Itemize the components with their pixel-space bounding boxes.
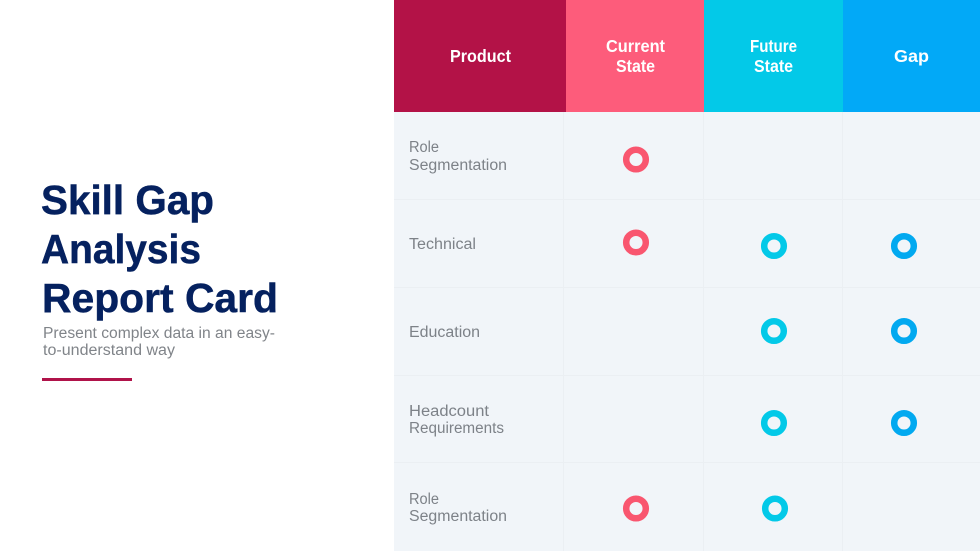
- header: Future State: Future: [750, 36, 797, 56]
- header: Future State: State: [754, 56, 793, 76]
- row label: Education: Education: [409, 324, 480, 341]
- marker: row 3 future: [764, 321, 784, 341]
- header: Current State: State: [616, 56, 655, 76]
- marker: row 5 current: [626, 499, 646, 518]
- header: Future State: [704, 0, 843, 112]
- row label: Technical: Technical: [409, 236, 476, 253]
- marker: row 2 future: [764, 236, 784, 256]
- marker: row 2 current: [626, 233, 646, 252]
- header: Current State: [566, 0, 704, 112]
- header: Product: [394, 0, 566, 112]
- header: Gap: Gap: [894, 46, 929, 66]
- row label: Role Segmentation: Segmentation: [409, 508, 507, 525]
- row label: Role Segmentation: Role: [409, 491, 439, 508]
- subtitle: to-understand way: [43, 342, 175, 359]
- row label: Headcount Requirements: Headcount: [409, 403, 490, 420]
- title: Skill Gap: [41, 177, 214, 223]
- subtitle: [43, 325, 275, 359]
- row label: Role Segmentation: [409, 491, 507, 525]
- marker: row 5 future: [765, 499, 785, 518]
- marker: row 4 future: [764, 413, 784, 433]
- title: Report Card: [42, 275, 278, 321]
- title: Analysis: [41, 226, 201, 272]
- subtitle: Present complex data in an easy-: [43, 325, 275, 342]
- row label: Role Segmentation: [409, 139, 507, 174]
- marker: row 2 gap: [894, 236, 914, 256]
- row label: Headcount Requirements: [409, 403, 504, 437]
- accent bar: [42, 378, 132, 381]
- marker: row 4 gap: [894, 413, 914, 433]
- marker: row 3 gap: [894, 321, 914, 341]
- header: Product: Product: [450, 46, 511, 66]
- row label: Role Segmentation: Segmentation: [409, 157, 507, 174]
- header: Current State: Current: [606, 36, 665, 56]
- marker: row 1 current: [626, 150, 646, 169]
- title: [41, 177, 278, 321]
- row label: Headcount Requirements: Requirements: [409, 420, 504, 437]
- row label: Role Segmentation: Role: [409, 139, 439, 156]
- header: Gap: [843, 0, 980, 112]
